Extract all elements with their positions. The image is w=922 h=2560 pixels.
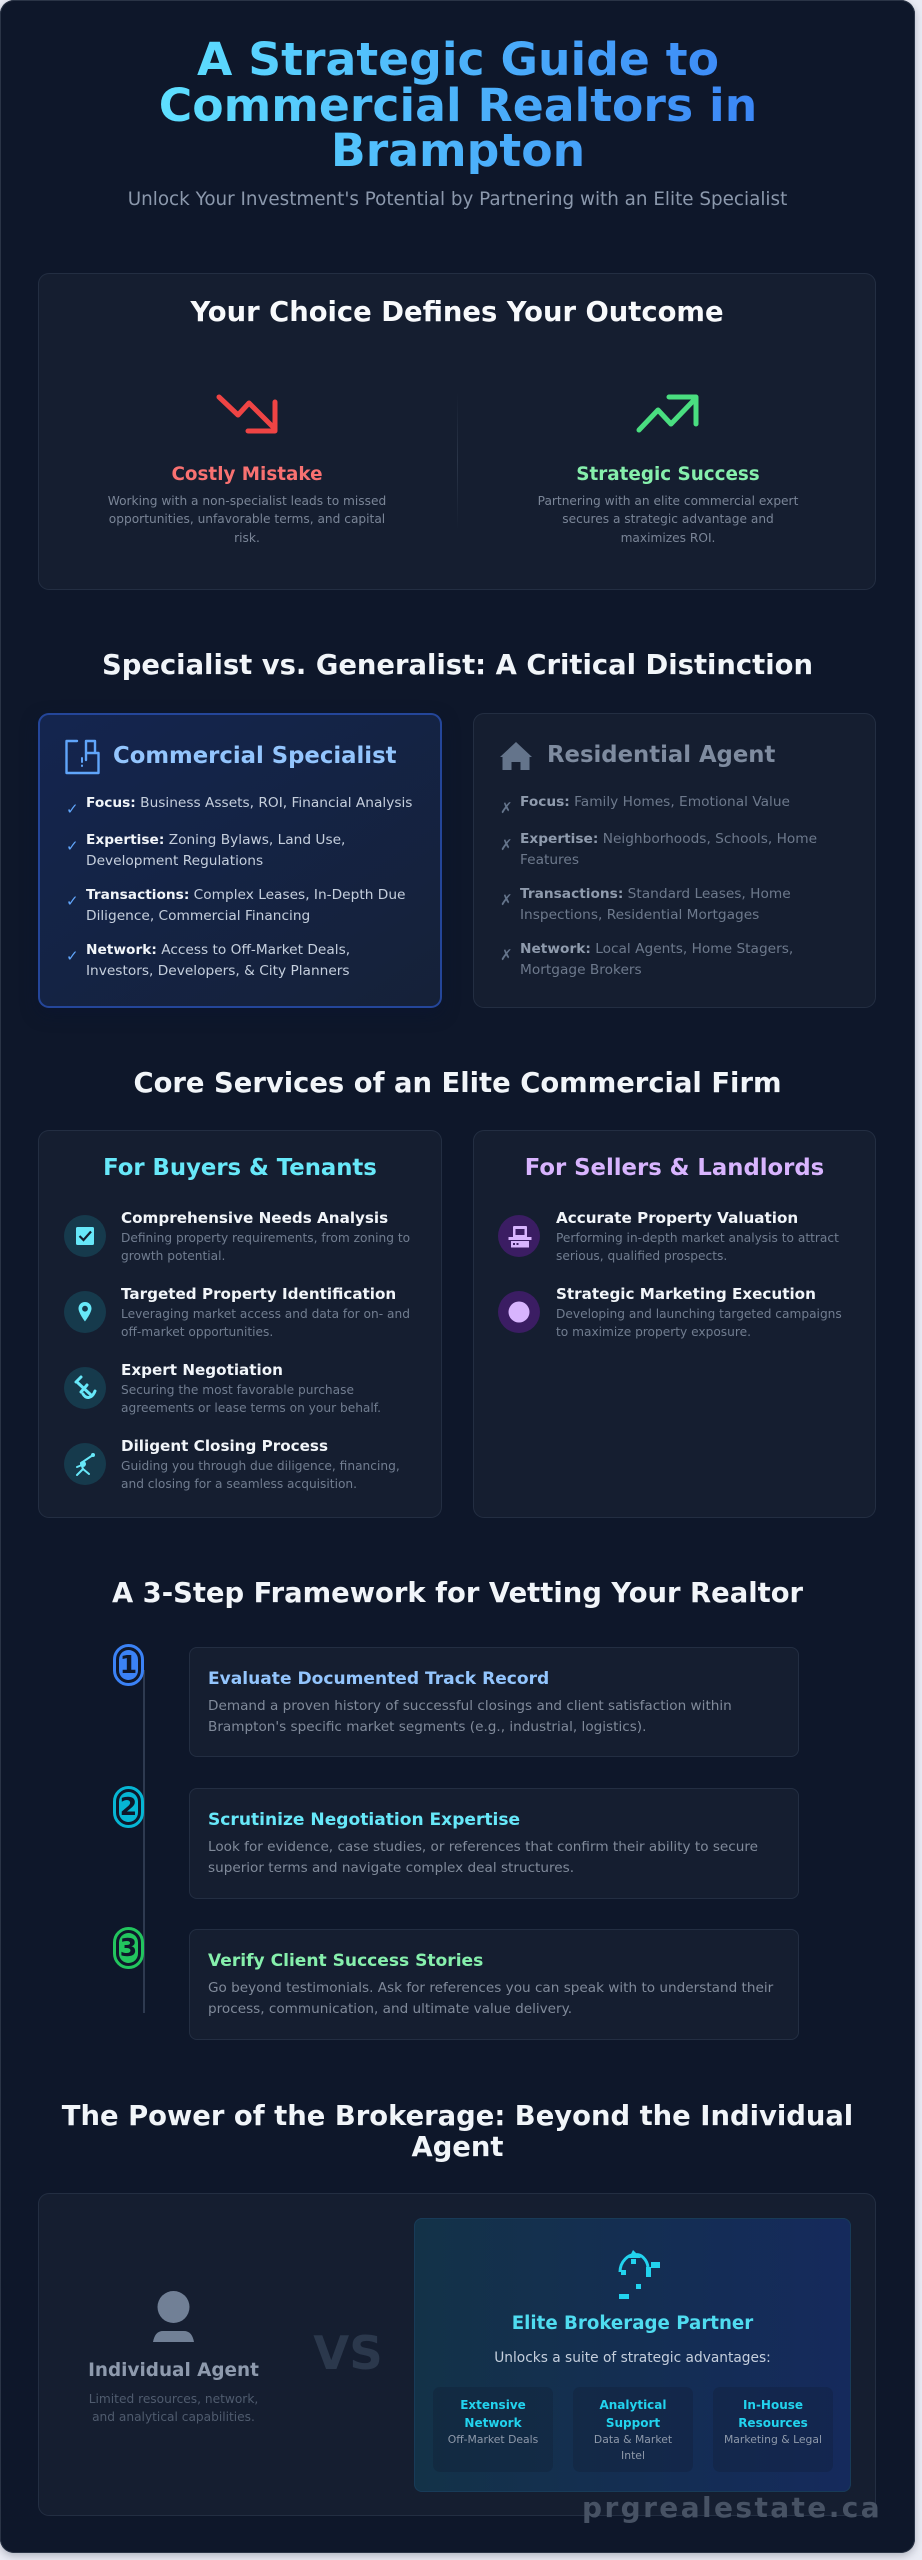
service: negotiation — [64, 1361, 381, 1415]
panel: elite brokerage partner — [414, 2218, 851, 2492]
service: property valuation: serious, qualified prospects. — [556, 1249, 727, 1263]
step 3 card: process, communication, and ultimate value delivery. — [208, 2001, 572, 2017]
panel: commercial specialist — [38, 713, 442, 1008]
expertise item: Expertise: Zoning Bylaws, Land Use, — [86, 832, 345, 848]
strategic success text: maximizes ROI. — [621, 531, 715, 545]
service: needs analysis: Defining property requirements, from zoning to — [121, 1231, 410, 1245]
title: A Strategic Guide to — [197, 33, 719, 86]
icon: map pin — [64, 1291, 106, 1333]
service: closing process: Diligent Closing Process — [121, 1437, 328, 1455]
transactions item — [66, 887, 405, 924]
step 1 card — [189, 1647, 799, 1757]
timeline with numbered badges — [113, 1644, 145, 2013]
service: marketing execution: Developing and launching targeted campaigns — [556, 1307, 842, 1321]
step 3 card: Verify Client Success Stories — [208, 1951, 483, 1971]
expertise item: Expertise: Neighborhoods, Schools, Home — [520, 831, 817, 847]
icon: network — [618, 2250, 660, 2299]
focus item — [500, 794, 790, 817]
transactions item — [500, 886, 791, 923]
service: closing process: Guiding you through due diligence, financing, — [121, 1459, 400, 1473]
service: negotiation: Securing the most favorable purchase — [121, 1383, 354, 1397]
icon: valuation — [498, 1215, 540, 1257]
badge 3 — [114, 1928, 142, 1968]
service: closing process — [64, 1437, 400, 1491]
panel: brokerage comparison — [38, 2193, 876, 2516]
costly mistake text: opportunities, unfavorable terms, and capital — [109, 512, 385, 526]
title — [158, 37, 758, 174]
focus item: Focus: Family Homes, Emotional Value — [520, 794, 790, 810]
panel: commercial specialist: ✓ — [66, 837, 79, 855]
tile: in-house resources: Marketing & Legal — [724, 2433, 822, 2446]
tile: in-house resources: Resources — [738, 2416, 808, 2430]
panel: residential agent: ✗ — [500, 946, 513, 964]
step 2 card — [189, 1788, 799, 1899]
step 3 card: Go beyond testimonials. Ask for references you can speak with to understand their — [208, 1980, 773, 1996]
step 2 card: superior terms and navigate complex deal structures. — [208, 1860, 574, 1876]
vs label: VS — [313, 2326, 383, 2380]
buyers heading: For Buyers & Tenants — [103, 1155, 377, 1181]
tile: analytical support: Intel — [621, 2449, 645, 2462]
step 1 card: Brampton's specific market segments (e.g., industrial, logistics). — [208, 1719, 646, 1735]
step 1 card: Evaluate Documented Track Record — [208, 1669, 549, 1689]
network item: Network: Access to Off-Market Deals, — [86, 942, 350, 958]
title: Commercial Realtors in — [159, 78, 757, 132]
service: property identification: Leveraging market access and data for on- and — [121, 1307, 410, 1321]
network item: Mortgage Brokers — [520, 962, 642, 978]
elite partner intro: Unlocks a suite of strategic advantages: — [494, 2350, 771, 2366]
watermark: prgrealestate.ca — [582, 2491, 882, 2524]
panel: residential agent: ✗ — [500, 891, 513, 909]
tile: extensive network — [433, 2387, 553, 2472]
panel: your choice defines your outcome — [38, 273, 876, 590]
step 3 card — [189, 1929, 799, 2040]
individual agent description — [89, 2392, 258, 2424]
service: property identification: Targeted Property Identification — [121, 1285, 396, 1303]
expertise item: Development Regulations — [86, 853, 263, 869]
service: negotiation: Expert Negotiation — [121, 1361, 283, 1379]
icon: building — [65, 740, 100, 774]
tile: in-house resources: In-House — [743, 2398, 803, 2412]
residential agent heading: Residential Agent — [547, 742, 775, 768]
service: needs analysis: growth potential. — [121, 1249, 225, 1263]
icon: house — [500, 742, 532, 770]
transactions item: Transactions: Standard Leases, Home — [520, 886, 791, 902]
tile: extensive network: Network — [464, 2416, 522, 2430]
section heading: 3-step framework: A 3-Step Framework for Vetting Your Realtor — [112, 1578, 803, 1609]
section heading: power of the brokerage: Agent — [412, 2132, 503, 2163]
panel: commercial specialist: ✓ — [66, 947, 79, 965]
tile: analytical support — [573, 2387, 693, 2472]
transactions item: Inspections, Residential Mortgages — [520, 907, 759, 923]
icon: closing — [64, 1443, 106, 1485]
costly mistake text — [108, 464, 386, 545]
tile: in-house resources — [713, 2387, 833, 2472]
badge 2: 2 — [120, 1792, 137, 1821]
icon: individual person — [153, 2291, 194, 2342]
individual agent heading: Individual Agent — [88, 2360, 259, 2381]
subtitle: Unlock Your Investment's Potential by Partnering with an Elite Specialist — [128, 189, 787, 210]
panel: commercial specialist: ✓ — [66, 892, 79, 910]
section heading: core services: Core Services of an Elite Commercial Firm — [134, 1068, 782, 1099]
expertise item: Features — [520, 852, 579, 868]
tile: analytical support: Analytical — [599, 2398, 667, 2412]
step 1 card: Demand a proven history of successful closings and client satisfaction within — [208, 1698, 732, 1714]
service: marketing execution — [498, 1285, 842, 1339]
costly mistake text: Working with a non-specialist leads to missed — [108, 494, 386, 508]
individual agent description: and analytical capabilities. — [92, 2410, 255, 2424]
service: property identification: off-market opportunities. — [121, 1325, 273, 1339]
service: marketing execution: to maximize property exposure. — [556, 1325, 751, 1339]
expertise item — [500, 831, 817, 868]
service: property valuation: Accurate Property Valuation — [556, 1209, 798, 1227]
network item: Network: Local Agents, Home Stagers, — [520, 941, 793, 957]
strategic success text: Strategic Success — [576, 464, 760, 485]
service: property valuation: Performing in-depth market analysis to attract — [556, 1231, 839, 1245]
badge 1: 1 — [120, 1650, 137, 1679]
badge 1 — [114, 1646, 142, 1684]
tile: analytical support: Data & Market — [594, 2433, 672, 2446]
costly mistake text: Costly Mistake — [171, 464, 322, 485]
commercial specialist heading: Commercial Specialist — [113, 743, 396, 769]
service: negotiation: agreements or lease terms on your behalf. — [121, 1401, 381, 1415]
strategic success text — [538, 464, 798, 545]
badge 2 — [114, 1788, 142, 1826]
specialist list — [66, 795, 412, 979]
strategic success text: secures a strategic advantage and — [562, 512, 774, 526]
residential list — [500, 794, 817, 978]
panel: commercial specialist: ✓ — [66, 800, 79, 818]
service: property valuation — [498, 1209, 839, 1263]
step 2 card: Scrutinize Negotiation Expertise — [208, 1810, 520, 1830]
icon: marketing — [498, 1291, 540, 1333]
costly mistake text: risk. — [234, 531, 260, 545]
panel: for buyers and tenants — [38, 1130, 442, 1518]
icon: checkbox — [64, 1215, 106, 1257]
service: needs analysis: Comprehensive Needs Analysis — [121, 1209, 388, 1227]
vertical divider and outcome icons — [216, 394, 698, 506]
network item: Investors, Developers, & City Planners — [86, 963, 350, 979]
badge 3: 3 — [120, 1933, 137, 1962]
section heading: specialist vs generalist: Specialist vs. Generalist: A Critical Distinction — [102, 650, 813, 681]
step 2 card: Look for evidence, case studies, or references that confirm their ability to secure — [208, 1839, 758, 1855]
strategic success text: Partnering with an elite commercial expert — [538, 494, 798, 508]
tile: extensive network: Extensive — [460, 2398, 526, 2412]
panel: for sellers and landlords — [473, 1130, 876, 1518]
panel: residential agent: ✗ — [500, 836, 513, 854]
panel heading: Your Choice Defines Your Outcome — [190, 297, 724, 328]
network item — [66, 942, 350, 979]
transactions item: Transactions: Complex Leases, In-Depth Due — [86, 887, 405, 903]
service: property identification — [64, 1285, 410, 1339]
sellers heading: For Sellers & Landlords — [525, 1155, 824, 1181]
panel: residential agent: ✗ — [500, 799, 513, 817]
service: needs analysis — [64, 1209, 410, 1263]
service: marketing execution: Strategic Marketing Execution — [556, 1285, 816, 1303]
elite partner heading: Elite Brokerage Partner — [512, 2313, 753, 2334]
transactions item: Diligence, Commercial Financing — [86, 908, 310, 924]
tile: analytical support: Support — [606, 2416, 660, 2430]
focus item — [66, 795, 412, 818]
focus item: Focus: Business Assets, ROI, Financial Analysis — [86, 795, 412, 811]
panel: residential agent — [473, 713, 876, 1008]
network item — [500, 941, 793, 978]
icon: negotiation — [64, 1367, 106, 1409]
expertise item — [66, 832, 345, 869]
section heading: power of the brokerage — [62, 2101, 853, 2163]
tile: extensive network: Off-Market Deals — [448, 2433, 538, 2446]
title: Brampton — [331, 124, 585, 177]
individual agent description: Limited resources, network, — [89, 2392, 258, 2406]
section heading: power of the brokerage: The Power of the Brokerage: Beyond the Individual — [62, 2101, 853, 2132]
service: closing process: and closing for a seamless acquisition. — [121, 1477, 357, 1491]
